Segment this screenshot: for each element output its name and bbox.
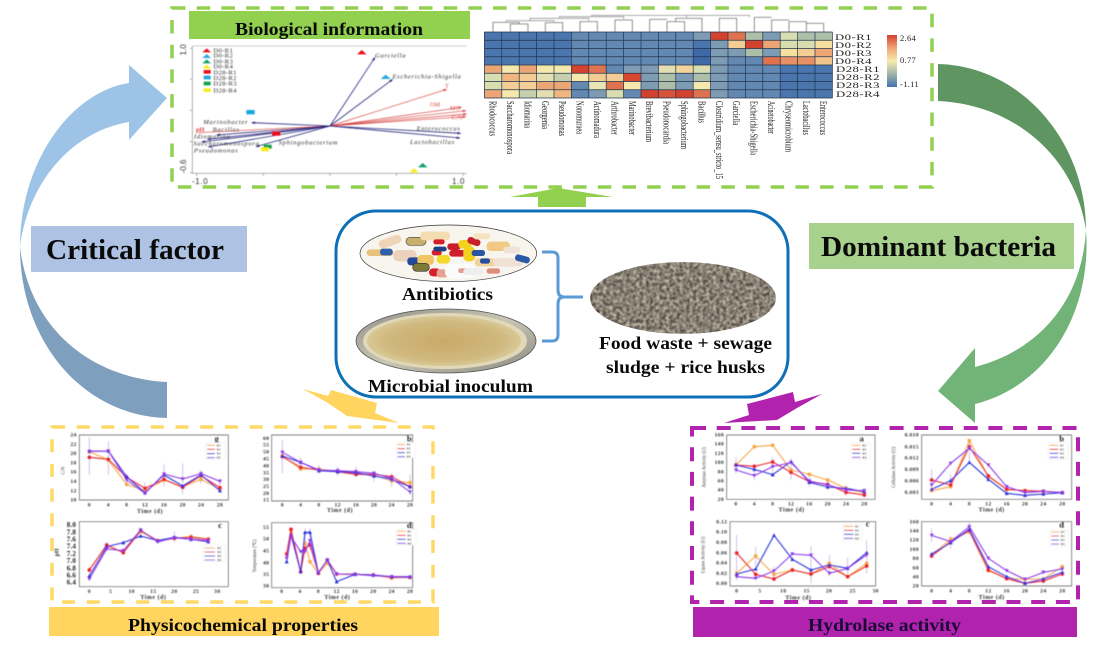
chart b: organic matter: 4 [299, 503, 302, 509]
chart d: protease: R1 [1061, 530, 1065, 534]
chart a: amylase: 60 [718, 479, 724, 485]
label: microbial inoculum: Microbial inoculum [368, 376, 533, 396]
chart d: protease: 16 [1003, 588, 1010, 594]
chart d: protease: d [1059, 519, 1064, 529]
chart c: pH: 25 [193, 589, 199, 595]
chart b: cellulase: 4 [949, 501, 952, 507]
legend: sample markers: D28-R4 [213, 87, 237, 94]
chart c: pH: 5 [109, 589, 112, 595]
arrow: critical factor, lower curve [20, 247, 167, 418]
vector labels: Pseudomonas [193, 147, 238, 154]
chart b: cellulase: Time (d) [979, 507, 1005, 514]
chart d: protease: 80 [913, 556, 919, 562]
heatmap column labels: Sphingobacterium [678, 101, 689, 149]
chart g: C/N: R3 [217, 452, 221, 456]
label: critical factor [31, 226, 247, 272]
chart d: protease: 20 [913, 584, 919, 590]
row D0-R2 [484, 40, 832, 48]
chart g: C/N: 20 [70, 451, 77, 457]
charts: physicochemical [54, 433, 416, 601]
chart c: pH: 20 [171, 589, 177, 595]
chart c: lipase: 0 [735, 588, 738, 594]
heatmap column labels: Idiomarina [521, 101, 532, 128]
chart c: pH: R2 [217, 550, 222, 554]
image: food waste compost mix [590, 262, 776, 334]
heatmap colour legend: -1.11 [900, 79, 919, 89]
legend: sample markers [202, 47, 237, 94]
chart c: pH: 7.0 [67, 557, 76, 565]
chart a: amylase: 0 [734, 501, 738, 507]
chart a: amylase: 80 [718, 469, 724, 475]
chart a: amylase: 12 [788, 501, 794, 507]
chart a: amylase: 160 [715, 433, 724, 439]
chart d: temperature: d [407, 520, 412, 530]
heatmap column labels: Rhodococcus [487, 101, 498, 136]
vector labels: MC [450, 106, 460, 112]
chart d: protease [910, 519, 1072, 601]
label: food waste mixture [599, 333, 772, 377]
chart b: cellulase: Cellulase Activity (U) [892, 446, 897, 488]
purple species vectors [202, 57, 461, 147]
chart d: temperature: R1 [407, 529, 412, 533]
chart g: C/N: 18 [70, 460, 77, 466]
chart c: pH: 7.6 [67, 535, 76, 543]
chart d: protease: 0 [930, 588, 933, 594]
chart b: cellulase: 0 [930, 501, 933, 507]
chart d: protease: 20 [1022, 588, 1028, 594]
chart c: pH: 6.6 [67, 572, 76, 580]
row D0-R4 [484, 57, 832, 65]
chart c: pH: R4 [217, 558, 222, 562]
chart g: C/N: 16 [70, 470, 77, 476]
bracket connecting inputs [542, 252, 583, 341]
chart b: organic matter: R1 [407, 443, 411, 447]
heading: biological information [189, 11, 470, 39]
heatmap column labels: Acinetobacter [765, 101, 776, 134]
heatmap row labels: D0-R3 [835, 48, 872, 58]
image: antibiotic pills [360, 225, 537, 282]
heatmap row labels [835, 32, 881, 99]
chart d: temperature: 55 [263, 525, 269, 531]
heatmap row labels: D28-R2 [836, 72, 880, 82]
chart d: protease: 12 [985, 588, 991, 594]
chart c: lipase: 10 [780, 588, 786, 594]
chart c: lipase: R1 [855, 524, 859, 528]
vector labels: Idiomarina [193, 134, 231, 141]
chart b: organic matter: 24 [388, 503, 395, 509]
vector labels: pH [196, 126, 205, 133]
chart: RDA ordination plot: -0.6 [179, 159, 188, 173]
label: food waste mixture: Food waste + sewage [599, 333, 772, 353]
chart c: pH: 7.4 [67, 543, 76, 551]
label: dominant bacteria [809, 223, 1074, 269]
heatmap column labels: Enterococcus [817, 101, 828, 135]
chart d: temperature: 24 [388, 589, 395, 595]
chart d: temperature: R2 [407, 533, 412, 537]
chart a: amylase: 24 [843, 501, 849, 507]
chart a: amylase: a [860, 433, 865, 443]
vector labels: C/N [452, 115, 463, 121]
chart c: lipase: R2 [855, 528, 859, 532]
chart c: lipase: 0.06 [716, 550, 727, 556]
chart b: cellulase: 28 [1059, 501, 1065, 507]
chart g: C/N: 14 [70, 479, 77, 485]
chart: RDA ordination plot: 1.0 [179, 44, 188, 55]
chart b: cellulase: b [1059, 433, 1064, 443]
chart d: temperature: R4 [407, 541, 412, 545]
chart g: C/N: 4 [107, 502, 110, 508]
chart a: amylase [703, 433, 875, 514]
chart a: amylase: 120 [715, 451, 724, 457]
chart b: organic matter: 45 [263, 457, 269, 463]
chart a: amylase: Time (d) [779, 507, 805, 514]
chart b: cellulase: 8 [968, 501, 971, 507]
chart c: lipase: 0.10 [716, 530, 727, 536]
vector labels: Bacillus [213, 126, 240, 133]
chart c: pH: 8.0 [67, 521, 76, 529]
chart b: cellulase: R4 [1060, 455, 1064, 459]
chart g: C/N: 0 [88, 502, 91, 508]
legend: sample markers: D28-R3 [213, 81, 237, 88]
heatmap column labels: Actinomadura [591, 101, 602, 138]
row D28-R4 [484, 90, 832, 98]
chart: heatmap dendrogram [493, 15, 824, 32]
heatmap row labels: D28-R4 [836, 89, 881, 99]
heatmap column labels: Chryseomicrobium [782, 101, 793, 152]
heatmap column labels: Clostridium_sensu_stricto_15 [713, 101, 724, 179]
label: food waste mixture: sludge + rice husks [606, 357, 765, 377]
chart a: amylase: 20 [825, 501, 831, 507]
heatmap row labels: D28-R1 [836, 64, 880, 74]
vector labels: Saccharomonospora [193, 140, 260, 147]
chart b: organic matter: 25 [263, 484, 269, 490]
chart a: amylase: 4 [753, 501, 756, 507]
heatmap row labels: D0-R1 [835, 32, 872, 42]
heatmap column labels: Lactobacillus [800, 101, 811, 135]
chart c: lipase: 25 [850, 588, 856, 594]
heatmap row labels: D0-R4 [835, 56, 873, 66]
vector labels: Garciella [375, 52, 406, 59]
chart b: organic matter: 50 [263, 450, 269, 456]
chart d: protease: 60 [913, 565, 919, 571]
chart c: pH: R1 [217, 546, 222, 550]
heatmap column labels: Marinobacter [626, 101, 637, 135]
chart d: protease: 140 [910, 529, 919, 535]
label: antibiotics: Antibiotics [402, 284, 493, 304]
chart b: cellulase: R3 [1060, 451, 1064, 455]
chart d: protease: R2 [1061, 534, 1065, 538]
chart b: organic matter: 0 [281, 503, 284, 509]
chart b: cellulase: 0.006 [905, 478, 919, 484]
chart a: amylase: 8 [771, 501, 774, 507]
chart b: organic matter: 40 [263, 463, 269, 469]
legend: sample markers: D0-R1 [213, 47, 233, 54]
chart d: temperature: 12 [333, 589, 340, 595]
chart b: cellulase: R2 [1060, 447, 1064, 451]
heatmap column labels: Bacillus [695, 101, 706, 123]
vector labels: Lactobacillus [409, 139, 455, 146]
chart d: temperature: 40 [263, 560, 269, 566]
heatmap column labels: Nonomuraea [574, 101, 585, 134]
chart c: pH: R3 [217, 554, 222, 558]
chart c: pH: pH [54, 548, 60, 556]
chart a: amylase: 16 [806, 501, 812, 507]
chart d: temperature [252, 520, 416, 601]
chart b: organic matter: b [407, 433, 412, 443]
chart g: C/N: 24 [198, 502, 204, 508]
chart d: protease: 24 [1040, 588, 1046, 594]
heading: physicochemical properties [49, 607, 439, 636]
chart d: temperature: 0 [280, 589, 283, 595]
chart d: protease: Time (d) [979, 594, 1005, 601]
heading: biological information: Biological information [235, 19, 423, 39]
chart g: C/N: 12 [70, 488, 77, 494]
chart c: pH: 7.8 [67, 528, 76, 536]
chart c: lipase: R4 [855, 536, 859, 540]
panel: centre materials [336, 211, 788, 397]
chart b: organic matter: 60 [263, 436, 269, 442]
chart g: C/N: 22 [70, 442, 77, 448]
chart d: temperature: R3 [407, 537, 412, 541]
heatmap colour legend [887, 33, 919, 89]
chart c: pH: 6.8 [67, 564, 76, 572]
arrow: dominant bacteria, lower curve [938, 230, 1087, 423]
heading: hydrolase activity [693, 607, 1077, 637]
heatmap column labels: Garciella [730, 101, 741, 125]
chart g: C/N: g [215, 433, 220, 443]
chart g: C/N: 10 [70, 498, 77, 504]
chart g: C/N: 16 [161, 502, 167, 508]
chart c: lipase [701, 519, 879, 602]
chart d: protease: R3 [1061, 538, 1065, 542]
chart b: cellulase: R1 [1060, 443, 1064, 447]
heatmap column labels: Arthrobacter [608, 101, 619, 135]
chart c: lipase: 15 [804, 588, 810, 594]
chart b: organic matter: 35 [263, 470, 269, 476]
chart c: lipase: Lipase Activity (U) [701, 536, 706, 573]
chart a: amylase: R2 [862, 447, 867, 451]
heatmap column labels: Georgenia [539, 101, 550, 129]
chart a: amylase: R1 [862, 443, 867, 447]
chart: RDA ordination plot: -1.0 [192, 177, 208, 186]
chart b: cellulase: 0.003 [905, 490, 919, 496]
chart b: cellulase: 0.009 [905, 467, 919, 473]
chart c: pH: 10 [129, 589, 135, 595]
legend: sample markers: D0-R3 [213, 58, 233, 65]
chart g: C/N: 28 [217, 502, 223, 508]
chart a: amylase: R4 [862, 455, 867, 459]
chart a: amylase: R3 [862, 451, 867, 455]
row D0-R1 [484, 32, 832, 40]
chart b: cellulase: 12 [985, 501, 991, 507]
panel: biological information border [172, 8, 932, 187]
heading: hydrolase activity: Hydrolase activity [808, 615, 961, 635]
chart d: temperature: 4 [298, 589, 302, 595]
ordination sample markers [246, 50, 428, 172]
heatmap colour legend: 0.77 [900, 55, 916, 65]
chart c: lipase: R3 [855, 532, 859, 536]
chart c: pH: 0 [88, 589, 91, 595]
heatmap column labels: Pseudomonas [556, 101, 567, 136]
chart g: C/N: R2 [217, 447, 221, 451]
chart c: lipase: 0.08 [716, 540, 727, 546]
chart a: amylase: 40 [718, 488, 724, 494]
chart b: organic matter: 30 [263, 477, 269, 483]
arrow: centre to physicochemical properties [303, 389, 399, 423]
heading: physicochemical properties: Physicochemical properties [128, 615, 358, 635]
heatmap colour legend: 2.64 [900, 33, 917, 43]
chart b: organic matter: 16 [353, 503, 359, 509]
vector labels: OM [430, 103, 441, 109]
heatmap column labels: Escherichia-Shigella [748, 101, 759, 155]
chart b: cellulase: 24 [1040, 501, 1046, 507]
vector labels: Marinobacter [202, 119, 248, 126]
arrow: critical factor, upper blue curve [20, 65, 167, 247]
chart: RDA ordination plot [179, 44, 467, 186]
chart c: pH: c [218, 520, 222, 530]
chart g: C/N: C/N [62, 466, 67, 475]
legend: sample markers: D0-R4 [213, 64, 233, 71]
chart d: temperature: 35 [263, 572, 269, 578]
panel: hydrolase activity border [692, 428, 1078, 602]
chart d: protease: 100 [910, 547, 919, 553]
label: dominant bacteria: Dominant bacteria [821, 231, 1057, 263]
heatmap column labels [487, 101, 828, 179]
chart c: lipase: 0.02 [716, 571, 727, 577]
vector labels: Escherichia-Shigella [391, 73, 462, 80]
chart g: C/N: R1 [217, 443, 221, 447]
chart g: C/N: Time (d) [137, 508, 163, 515]
chart d: temperature: 20 [370, 589, 376, 595]
chart d: temperature: 45 [263, 548, 269, 554]
chart b: organic matter: 15 [263, 498, 269, 504]
chart g: C/N [62, 433, 228, 515]
chart c: lipase: 30 [873, 588, 879, 594]
chart b: organic matter: R3 [407, 451, 411, 455]
chart c: pH: 6.4 [67, 579, 76, 587]
row D28-R1 [484, 65, 832, 73]
chart d: temperature: Time (d) [324, 594, 350, 601]
heatmap column labels: Saccharomonospora [504, 101, 515, 154]
chart b: organic matter: 20 [263, 491, 269, 497]
vector labels: T [445, 84, 449, 90]
chart d: temperature: 8 [317, 589, 320, 595]
vector labels: Enterococcus [416, 125, 461, 132]
chart b: organic matter: Time (d) [327, 507, 353, 514]
panel: physicochemical properties border [52, 427, 433, 602]
chart d: temperature: 50 [263, 536, 269, 542]
arrow: dominant bacteria, upper green curve [938, 64, 1086, 230]
row D28-R3 [484, 82, 832, 90]
chart c: lipase: 20 [826, 588, 832, 594]
chart b: organic matter: 8 [317, 503, 321, 509]
chart c: pH: 7.2 [67, 550, 76, 558]
legend: sample markers: D28-R1 [213, 69, 237, 76]
legend: sample markers: D0-R2 [213, 53, 233, 60]
chart d: temperature: 28 [407, 589, 413, 595]
red environmental vectors [198, 89, 467, 133]
chart d: protease: 8 [968, 588, 971, 594]
row D28-R2 [484, 73, 832, 82]
chart d: temperature: Temperature (℃) [252, 539, 258, 572]
chart b: cellulase: 16 [1003, 501, 1010, 507]
chart g: C/N: 8 [125, 502, 128, 508]
chart g: C/N: 24 [70, 433, 77, 439]
chart b: cellulase: 0.015 [905, 444, 919, 450]
chart c: pH: Time (d) [140, 594, 166, 601]
chart d: temperature: 30 [263, 584, 269, 590]
chart b: organic matter: 28 [407, 503, 413, 509]
chart c: lipase: 0.00 [716, 581, 727, 587]
chart: heatmap cells [484, 32, 832, 98]
chart b: organic matter: 20 [371, 503, 377, 509]
label: critical factor: Critical factor [46, 234, 224, 266]
chart d: protease: 28 [1059, 588, 1065, 594]
chart g: C/N: R4 [217, 456, 221, 460]
chart b: organic matter [263, 433, 415, 514]
chart g: C/N: 20 [180, 502, 186, 508]
chart a: amylase: 20 [718, 497, 724, 503]
chart b: cellulase: 20 [1022, 501, 1028, 507]
arrow: centre to biological information [510, 188, 613, 207]
chart d: protease: 4 [949, 588, 952, 594]
chart c: lipase: 0.12 [716, 519, 727, 525]
chart b: organic matter: 12 [334, 503, 341, 509]
chart a: amylase: 100 [715, 460, 724, 466]
charts: hydrolase [701, 433, 1072, 602]
chart d: protease: 120 [910, 538, 919, 544]
chart b: organic matter: R2 [407, 447, 411, 451]
chart c: lipase: Time (d) [785, 595, 811, 602]
chart c: pH: 30 [214, 589, 220, 595]
chart a: amylase: Amylase Activity (U) [703, 447, 708, 488]
chart c: lipase: 0.04 [716, 561, 727, 567]
chart c: pH: 15 [150, 589, 156, 595]
arrow: centre to hydrolase activity [724, 392, 822, 423]
chart d: protease: R4 [1061, 542, 1065, 546]
chart b: organic matter: R4 [407, 455, 411, 459]
heatmap row labels: D28-R3 [836, 80, 880, 90]
chart a: amylase: 28 [861, 501, 867, 507]
chart c: pH [54, 520, 228, 601]
heatmap row labels: D0-R2 [835, 40, 872, 50]
heatmap column labels: Pseudonocardia [661, 101, 672, 144]
vector labels [193, 52, 463, 154]
chart d: protease: 160 [910, 519, 919, 525]
chart g: C/N: 12 [142, 502, 148, 508]
chart: RDA ordination plot: 1.0 [452, 177, 465, 186]
chart d: protease: 40 [913, 574, 919, 580]
vector labels: Sphingobacterium [279, 139, 338, 146]
chart b: cellulase: 0.012 [905, 456, 919, 462]
image: microbial inoculum dish [356, 309, 536, 373]
chart a: amylase: 140 [715, 442, 724, 448]
chart b: cellulase [892, 433, 1072, 514]
legend: sample markers: D28-R2 [213, 75, 237, 82]
chart c: lipase: 5 [758, 588, 762, 594]
heatmap column labels: Brevibacterium [643, 101, 654, 142]
chart d: temperature: 16 [352, 589, 358, 595]
chart c: lipase: c [866, 519, 870, 529]
chart b: cellulase: 0.018 [905, 433, 919, 439]
chart b: organic matter: 55 [263, 443, 269, 449]
row D0-R3 [484, 48, 832, 57]
